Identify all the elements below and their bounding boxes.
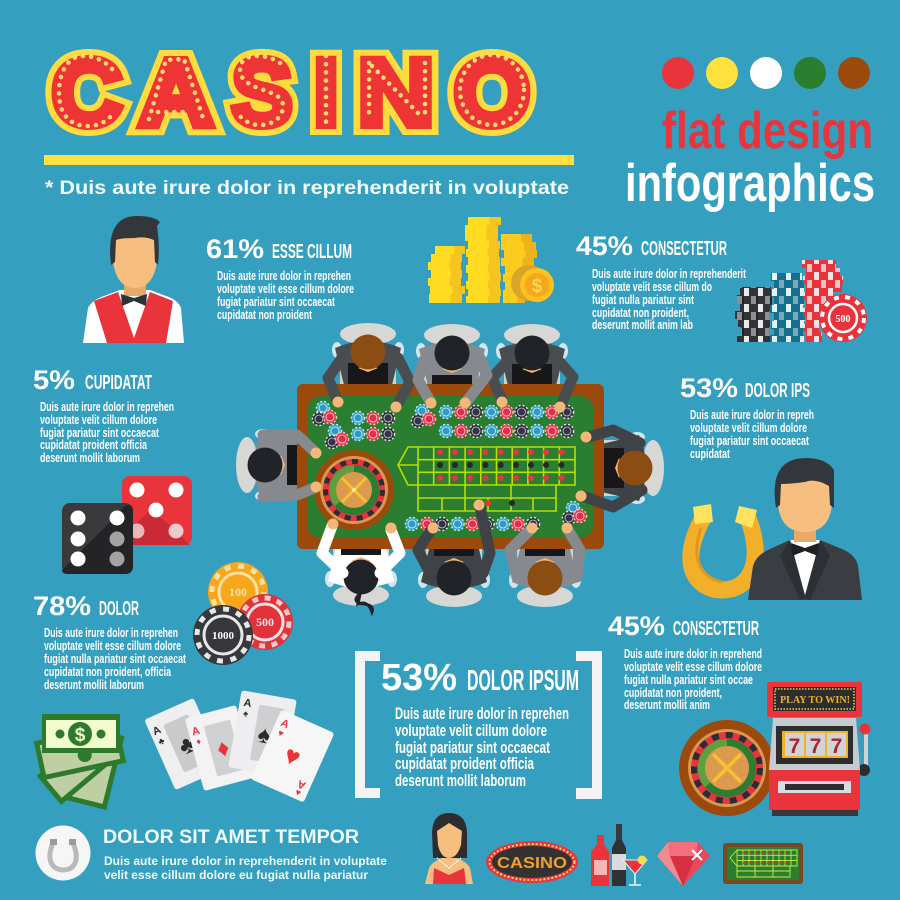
stat: 53% dolor ips: voluptate velit cillum dolore (690, 421, 807, 435)
title: CASINO marquee: I (313, 39, 339, 146)
player arms and hands (263, 358, 642, 577)
icon: playing cards: A (191, 725, 201, 738)
stat: 78% dolor: deserunt mollit laborum (44, 678, 144, 692)
title: CASINO marquee: I (313, 39, 339, 146)
title: CASINO marquee: N (358, 40, 434, 146)
icon: playing cards: ♥ (276, 728, 285, 739)
right bracket (576, 651, 602, 799)
stat: 45% consectetur (bottom): Duis aute irure dolor in reprehend (624, 647, 762, 661)
table top (297, 384, 604, 549)
title: CASINO marquee: C (52, 40, 122, 146)
stat: 53% dolor ipsum with brackets: 53% (381, 657, 457, 699)
stat: 45% consectetur (top): deserunt mollit anim lab (592, 318, 693, 332)
icon: casino chips 100 500 1000: 100 (229, 585, 247, 599)
stat: 5% cupidatat: voluptate velit cillum dolore (40, 413, 157, 427)
icon: slot machine: PLAY TO WIN! (780, 694, 850, 706)
stat: 78% dolor: 78% (33, 591, 91, 621)
title: CASINO marquee: S (232, 39, 292, 145)
icon: woman in red (425, 813, 473, 884)
stat: 53% dolor ips (680, 373, 814, 461)
footer text block: DOLOR SIT AMET TEMPOR (103, 827, 359, 848)
stat: 45% consectetur (top) (576, 231, 747, 332)
icon: playing cards: A (279, 717, 291, 731)
subtitle: * Duis aute irure dolor in reprehenderit in voluptate (45, 177, 569, 199)
title: CASINO marquee: C (52, 40, 122, 146)
icon: playing cards: ♥ (279, 739, 306, 773)
stat: 61% esse cillum: 61% (206, 234, 264, 264)
stat: 45% consectetur (bottom): fugiat nulla pariatur sint occae (624, 673, 753, 687)
stat: 53% dolor ips: fugiat pariatur sint occaecat (690, 434, 810, 448)
icon: playing cards: ♥ (294, 787, 303, 798)
icon: playing cards: ♣ (175, 730, 200, 761)
title: CASINO marquee (52, 39, 530, 146)
stat: 61% esse cillum (206, 234, 354, 322)
stat: 61% esse cillum: cupidatat non proident (217, 308, 313, 322)
icon: horseshoe (691, 504, 757, 590)
icon: casino sign (486, 841, 578, 883)
betting grid (398, 447, 575, 511)
stat: 53% dolor ips: Duis aute irure dolor in repreh (690, 408, 814, 422)
stat: 78% dolor: DOLOR (99, 598, 139, 620)
icon: slot machine (767, 682, 870, 816)
icon: playing cards (144, 690, 334, 803)
stat: 45% consectetur (top): fugiat nulla pariatur sint (592, 293, 695, 307)
icon: poker chip stacks: 500 (836, 314, 850, 325)
icon: slot machine: 7 (831, 735, 842, 758)
title: CASINO marquee: A (139, 40, 213, 146)
icon: casino chips 100 500 1000: 500 (256, 615, 274, 629)
icon: slot machine: 7 (810, 735, 821, 758)
stat: 61% esse cillum: voluptate velit esse cillum dolore (217, 282, 354, 296)
stat: 53% dolor ips: cupidatat (690, 447, 731, 461)
stat: 45% consectetur (bottom): cupidatat non proident, (624, 686, 722, 700)
title: CASINO marquee: O (454, 39, 530, 146)
stat: 53% dolor ipsum with brackets: deserunt mollit laborum (395, 772, 526, 790)
icon: casino chips 100 500 1000 (193, 562, 293, 665)
icon: banknotes (34, 714, 126, 810)
icon: playing cards: ♠ (256, 721, 273, 750)
icon: playing cards: ♣ (157, 735, 166, 747)
stat: 5% cupidatat: cupidatat proident officia (40, 438, 148, 452)
icon: dice (62, 476, 192, 574)
icon: casino sign: CASINO (497, 855, 567, 872)
icon: dealer (83, 216, 184, 343)
footer text block: velit esse cillum dolore eu fugiat nulla pariatur (104, 870, 369, 882)
title underline bar (44, 155, 574, 165)
icon: tuxedo man (748, 458, 862, 600)
stat: 53% dolor ips: DOLOR IPS (745, 380, 810, 402)
stat: 53% dolor ipsum with brackets: voluptate velit cillum dolore (395, 722, 547, 740)
icon: banknotes: $ (75, 725, 86, 746)
footer text block: Duis aute irure dolor in reprehenderit in voluptate (104, 856, 387, 868)
player bodies (236, 323, 664, 612)
stat: 61% esse cillum: Duis aute irure dolor in reprehen (217, 269, 351, 283)
stat: 5% cupidatat: fugiat pariatur sint occaecat (40, 426, 160, 440)
stat: 78% dolor: voluptate velit esse cillum dolore (44, 639, 181, 653)
icon: casino chips 100 500 1000: 1000 (212, 630, 234, 642)
stat: 78% dolor: cupidatat non proident, officia (44, 665, 172, 679)
stat: 5% cupidatat: 5% (33, 365, 75, 395)
stat: 53% dolor ipsum with brackets: fugiat pariatur sint occaecat (395, 739, 550, 757)
icon: playing cards: ♠ (243, 708, 249, 719)
icon: playing cards: ♦ (214, 734, 233, 763)
title: CASINO marquee: S (232, 39, 292, 145)
stat: 53% dolor ipsum with brackets: DOLOR IPSUM (467, 665, 579, 697)
icon: playing cards: A (296, 777, 308, 791)
stat: 5% cupidatat: CUPIDATAT (85, 372, 152, 394)
icon: gold coin stacks: $ (532, 276, 543, 297)
colour palette dots (662, 57, 870, 89)
table felt (307, 396, 594, 538)
stat: 53% dolor ipsum with brackets: cupidatat proident officia (395, 755, 535, 773)
icon: poker chip stacks (735, 260, 867, 342)
stat: 45% consectetur (bottom): voluptate velit esse cillum dolore (624, 660, 762, 674)
stat: 5% cupidatat: Duis aute irure dolor in reprehen (40, 400, 174, 414)
stat: 53% dolor ipsum with brackets: Duis aute irure dolor in reprehen (395, 705, 569, 723)
stat: 5% cupidatat: deserunt mollit laborum (40, 451, 140, 465)
stat: 45% consectetur (bottom): 45% (608, 611, 665, 641)
icon: playing cards: ♦ (195, 736, 202, 747)
icon: horseshoe badge (36, 826, 90, 880)
stat: 45% consectetur (bottom): CONSECTETUR (673, 618, 759, 640)
table chips (312, 401, 587, 531)
stat: 61% esse cillum: fugiat pariatur sint occaecat (217, 295, 336, 309)
stat: 45% consectetur (top): 45% (576, 231, 633, 261)
stat: 78% dolor: fugiat nulla pariatur sint occaecat (44, 652, 187, 666)
icon: roulette wheel (679, 720, 775, 816)
icon: gold coin stacks (428, 217, 554, 303)
footer text block (103, 827, 387, 882)
stat: 45% consectetur (top): Duis aute irure dolor in reprehenderit (592, 267, 747, 281)
stat: 5% cupidatat (33, 365, 174, 465)
title: CASINO marquee: N (358, 40, 434, 146)
stat: 45% consectetur (bottom): deserunt mollit anim (624, 698, 710, 712)
stat: 45% consectetur (top): CONSECTETUR (641, 238, 727, 260)
roulette wheel (314, 450, 394, 530)
icon: ruby diamond (657, 842, 710, 886)
roulette table scene (236, 323, 664, 612)
stat: 78% dolor: Duis aute irure dolor in reprehen (44, 626, 178, 640)
stat: 45% consectetur (bottom) (608, 611, 762, 712)
left bracket (355, 651, 380, 798)
title: CASINO marquee: O (454, 39, 530, 146)
stat: 45% consectetur (top): voluptate velit esse cillum do (592, 280, 712, 294)
stat: 53% dolor ipsum with brackets (355, 651, 602, 799)
icon: playing cards: A (151, 724, 163, 738)
stat: 78% dolor (33, 591, 187, 692)
stat: 53% dolor ips: 53% (680, 373, 738, 403)
icon: mini roulette table (723, 843, 803, 884)
stat: 45% consectetur (top): cupidatat non proident, (592, 306, 689, 320)
icon: playing cards: A (243, 697, 252, 710)
title: CASINO marquee: A (139, 40, 213, 146)
icon: bottles and cocktail (591, 824, 647, 886)
icon: slot machine: 7 (789, 735, 800, 758)
stat: 61% esse cillum: ESSE CILLUM (272, 241, 352, 263)
